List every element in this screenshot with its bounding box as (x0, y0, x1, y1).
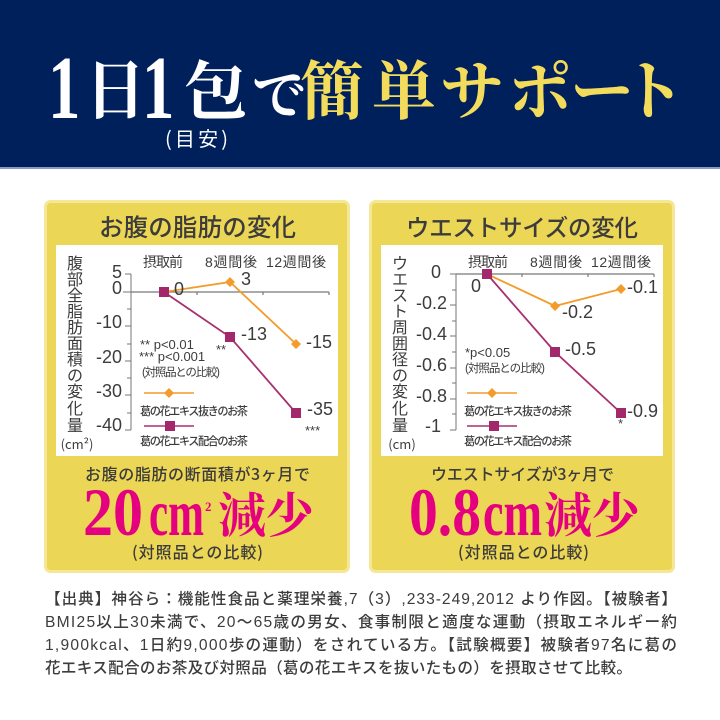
line chart: abdominal fat: -20 (96, 347, 122, 367)
line chart: abdominal fat: ** (216, 342, 226, 357)
title: で (252, 53, 306, 130)
line chart: abdominal fat: *** (305, 423, 320, 438)
line chart: abdominal fat: -15 (306, 332, 332, 352)
line chart: abdominal fat: -13 (241, 324, 267, 344)
y axis label: 積 (67, 346, 83, 370)
callout: waist size (409, 461, 643, 563)
y axis label: 肪 (67, 314, 83, 338)
line chart: abdominal fat (61, 250, 333, 453)
y axis label: 化 (67, 395, 83, 419)
title: 包 (183, 41, 247, 133)
callout: waist size: 減少 (544, 477, 643, 546)
y axis label: ウ (392, 250, 408, 274)
line chart: waist size: -0.6 (416, 355, 447, 375)
callout: abdominal fat: 減少 (218, 477, 317, 546)
line chart: waist size: (対照品との比較) (465, 362, 545, 375)
y axis label: 量 (67, 412, 83, 436)
y axis label: 面 (67, 330, 83, 354)
y axis label: の (392, 362, 408, 386)
panel heading: ウエストサイズの変化 (406, 209, 638, 243)
line chart: waist size: -0.1 (627, 277, 658, 297)
y axis label: 化 (392, 395, 408, 419)
y axis label: 部 (67, 266, 83, 290)
line chart: waist size: -0.2 (416, 293, 447, 313)
line chart: waist size: 12週間後 (591, 254, 651, 270)
y axis label: (cm) (388, 434, 416, 453)
line chart: waist size: 8週間後 (530, 254, 582, 270)
y axis label: エ (392, 266, 408, 290)
line chart: waist size: -1 (425, 416, 441, 436)
line chart: abdominal fat: ** p<0.01 (140, 337, 194, 352)
legend: 葛の花エキス配合のお茶 (464, 433, 572, 449)
title (48, 38, 685, 138)
y axis label: ト (392, 298, 408, 322)
callout: abdominal fat: 20 (83, 474, 143, 550)
title note: (目安) (165, 123, 228, 152)
title: 1 (48, 38, 80, 138)
line chart: abdominal fat: -40 (96, 415, 122, 435)
line chart: waist size: *p<0.05 (465, 345, 510, 360)
y axis label: ス (392, 282, 408, 306)
y axis label: 周 (392, 314, 408, 338)
line chart: abdominal fat: -10 (96, 312, 122, 332)
y axis label: 腹 (67, 250, 83, 274)
line chart: waist size: -0.9 (627, 401, 658, 421)
line chart: waist size: -0.8 (416, 386, 447, 406)
line chart: abdominal fat: 摂取前 (143, 254, 183, 270)
line chart: abdominal fat: 12週間後 (266, 254, 326, 270)
line chart: abdominal fat: (対照品との比較) (142, 366, 220, 379)
y axis label: 囲 (392, 330, 408, 354)
legend: 葛の花エキス抜きのお茶 (464, 403, 572, 419)
y axis label (388, 250, 416, 453)
line chart: waist size: -0.2 (562, 302, 593, 322)
line chart: abdominal fat: *** p<0.001 (139, 349, 205, 364)
callout: abdominal fat: (対照品との比較) (132, 539, 263, 563)
callout: abdominal fat: cm (149, 477, 204, 550)
line chart: waist size: -0.4 (416, 324, 447, 344)
callout: abdominal fat: お腹の脂肪の断面積が3ヶ月で (85, 461, 310, 485)
panel: abdominal fat (46, 202, 348, 572)
source note: 【出典】神谷ら：機能性食品と薬理栄養,7（3）,233-249,2012 より作図。【被験者】 (45, 590, 677, 608)
y axis label: 脂 (67, 298, 83, 322)
line chart: waist size: * (618, 416, 623, 431)
legend (140, 388, 248, 449)
line chart: abdominal fat: 5 (112, 262, 122, 282)
y axis label (61, 250, 93, 453)
legend (464, 388, 572, 449)
callout: abdominal fat: 2 (205, 499, 212, 514)
title: 1 (142, 38, 174, 138)
line chart: abdominal fat: 8週間後 (205, 254, 257, 270)
callout: waist size: 0.8 (409, 474, 481, 550)
source note: 花エキス配合のお茶及び対照品（葛の花エキスを抜いたもの）を摂取させて比較。 (45, 659, 632, 677)
panel heading: お腹の脂肪の変化 (99, 209, 296, 244)
y axis label: 変 (392, 378, 408, 402)
line chart: waist size: 0 (431, 262, 441, 282)
y axis label: (cm²) (61, 434, 93, 453)
source note (45, 590, 677, 677)
line chart: abdominal fat: 3 (241, 269, 251, 289)
line chart: abdominal fat: -35 (307, 399, 333, 419)
y axis label: の (67, 362, 83, 386)
callout: waist size: (対照品との比較) (458, 539, 589, 563)
line chart: waist size: 0 (471, 276, 481, 296)
header band (0, 0, 720, 169)
line chart: abdominal fat: 0 (174, 279, 184, 299)
source note: 1,900kcal、1日約9,000歩の運動）をされている方。【試験概要】被験者97名に葛の (45, 636, 677, 654)
y axis label: 径 (392, 346, 408, 370)
y axis label: 変 (67, 378, 83, 402)
callout: waist size: cm (483, 477, 542, 550)
line chart: abdominal fat: -30 (96, 381, 122, 401)
callout: waist size: ウエストサイズが3ヶ月で (431, 461, 614, 485)
source note: BMI25以上30未満で、20～65歳の男女、食事制限と適度な運動（摂取エネルギー約 (45, 613, 677, 631)
line chart: abdominal fat: 0 (112, 278, 122, 298)
legend: 葛の花エキス配合のお茶 (140, 433, 248, 449)
legend: 葛の花エキス抜きのお茶 (140, 403, 248, 419)
callout: abdominal fat (83, 461, 317, 563)
title: 日 (85, 38, 145, 132)
y axis label: 量 (392, 412, 408, 436)
line chart: waist size: -0.5 (565, 339, 596, 359)
line chart: waist size (388, 250, 658, 453)
title: 簡単サポート (300, 41, 685, 133)
panel: waist size (370, 202, 674, 572)
line chart: waist size: 摂取前 (468, 254, 508, 270)
y axis label: 全 (67, 282, 83, 306)
